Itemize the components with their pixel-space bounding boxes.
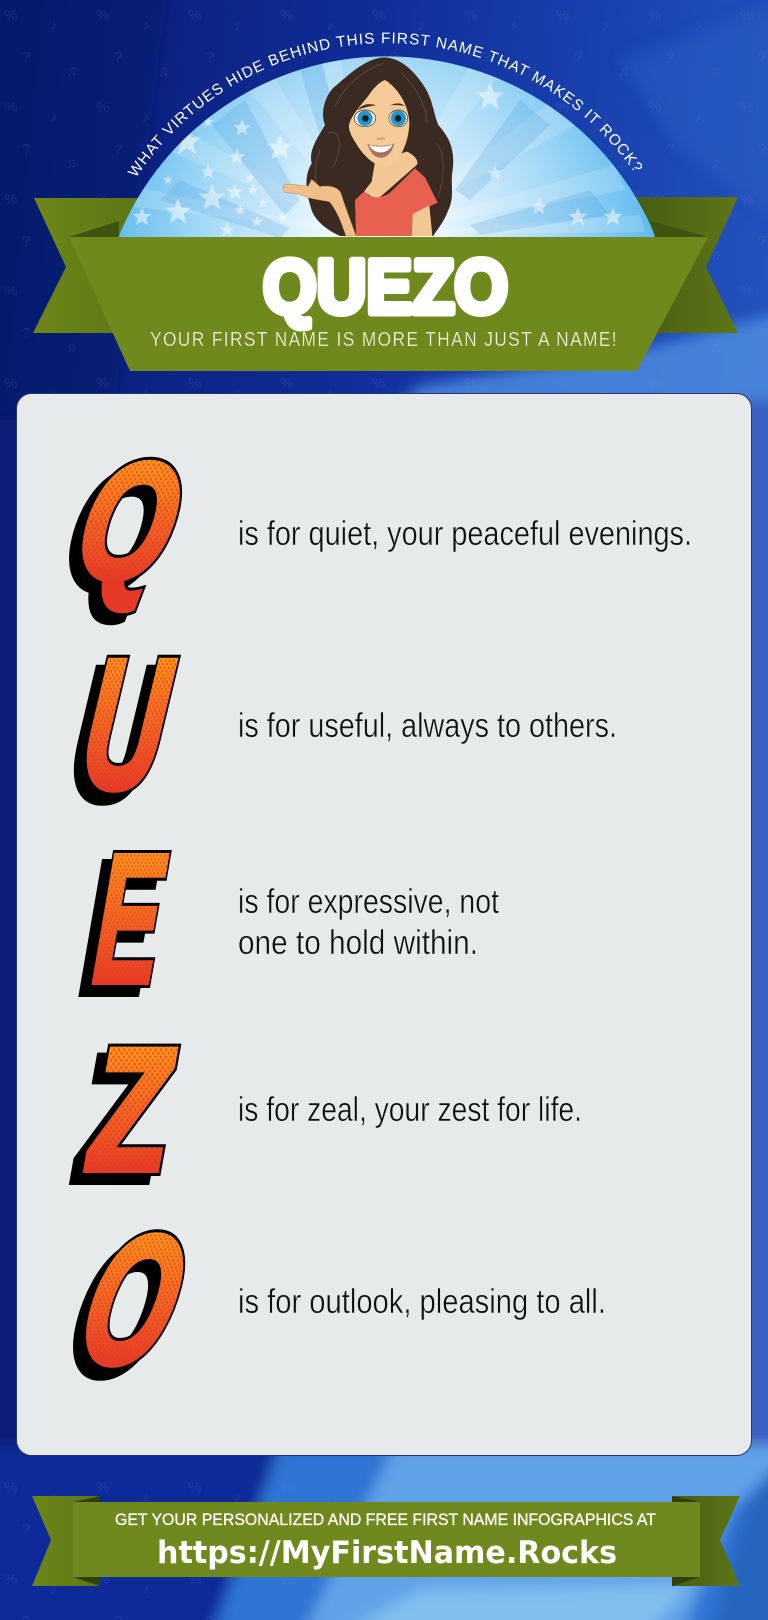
mouth: [367, 143, 394, 158]
ribbon tail: left: [33, 198, 140, 333]
footer banner: [32, 1496, 740, 1586]
text: Q line: is for quiet, your peaceful evenings.: [238, 515, 692, 553]
ribbon fold shadows: [69, 221, 708, 237]
text: Z line: is for zeal, your zest for life.: [238, 1091, 582, 1129]
letter O: O: [52, 1207, 191, 1412]
letter Q: Q: [52, 438, 184, 622]
panel: name letters: one to hold within.: [238, 924, 478, 962]
curved question text: WHAT VIRTUES HIDE BEHIND THIS FIRST NAME THAT MAKES IT ROCK?: [127, 32, 642, 176]
letter Q: Q: [63, 429, 195, 613]
shirt: [355, 168, 438, 236]
header banner with dome and character: [33, 32, 738, 371]
letter Z: Z: [84, 1012, 177, 1207]
text: E lines: is for expressive, not: [238, 883, 499, 921]
letter U: U: [62, 630, 170, 838]
letter U: U: [73, 620, 181, 828]
letter Q: Q: [63, 429, 195, 613]
character illustration: [283, 57, 453, 236]
subtitle: YOUR FIRST NAME IS MORE THAN JUST A NAME!: [150, 329, 618, 351]
footer tail: right: [672, 1496, 740, 1586]
eyes: [354, 110, 376, 127]
text: U line: is for useful, always to others.: [238, 707, 617, 745]
text: O line: is for outlook, pleasing to all.: [238, 1283, 606, 1321]
arm and hand: [283, 179, 356, 236]
letter Z: Z: [84, 1012, 177, 1207]
letter Z: Z: [84, 1012, 177, 1207]
neck: [364, 152, 417, 200]
letter E: E: [88, 815, 172, 1023]
brows: [357, 103, 405, 110]
letter U: U: [73, 620, 181, 828]
face: [349, 80, 409, 167]
footer url: https://MyFirstName.Rocks: [157, 1535, 617, 1571]
letter Z: Z: [73, 1021, 166, 1216]
letter O: O: [63, 1197, 202, 1402]
dome with starburst: [119, 56, 655, 237]
letter E: E: [77, 824, 161, 1032]
right arm: [412, 205, 432, 236]
letter U: U: [73, 620, 181, 828]
letter Q: Q: [63, 429, 195, 613]
ribbon tail: right: [632, 197, 738, 333]
letter E: E: [88, 815, 172, 1023]
letter O: O: [63, 1197, 202, 1402]
footer folds: [73, 1496, 700, 1586]
letter E: E: [88, 815, 172, 1023]
letter O: O: [63, 1197, 202, 1402]
footer line: GET YOUR PERSONALIZED AND FREE FIRST NAME INFOGRAPHICS AT: [115, 1510, 656, 1529]
panel: name letters: [16, 394, 752, 1456]
footer tail: left: [32, 1496, 100, 1586]
ribbon main: [69, 237, 708, 371]
footer ribbon: [73, 1502, 700, 1577]
title: QUEZO: [263, 245, 508, 330]
